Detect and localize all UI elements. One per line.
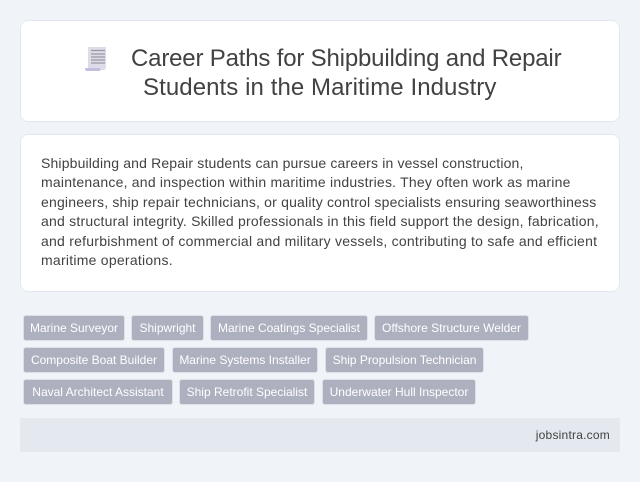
description text: maritime operations. [41,252,173,268]
footer bar [20,418,620,452]
job tags: Marine Systems Installer [179,353,311,367]
job tags: Naval Architect Assistant [32,385,164,399]
description text: and structural integrity. Skilled professionals in this field support the design, fabrication, [41,213,599,229]
job tags: Marine Coatings Specialist [218,321,360,335]
job tags: Ship Propulsion Technician [333,353,476,367]
icon: paper scroll [85,47,106,71]
job tags: Ship Retrofit Specialist [187,385,307,399]
job tags [23,315,529,405]
job tags: Offshore Structure Welder [382,321,521,335]
title [131,45,562,101]
panel: description [20,134,620,292]
description text [41,155,599,268]
job tags: Marine Surveyor [30,321,118,335]
title: Career Paths for Shipbuilding and Repair [131,45,561,72]
job tags: Underwater Hull Inspector [330,385,468,399]
title: Students in the Maritime Industry [143,74,496,101]
job tags: Shipwright [139,321,196,335]
description text: and refurbishment of commercial and military vessels, contributing to safe and efficient [41,233,597,249]
description text: engineers, ship repair technicians, or quality control specialists ensuring seaworthiness [41,194,596,210]
description text: Shipbuilding and Repair students can pursue careers in vessel construction, [41,155,524,171]
panel: header [20,20,620,122]
footer source text: jobsintra.com [536,428,610,442]
description text: maintenance, and inspection within maritime industries. They often work as marine [41,174,571,190]
job tags: Composite Boat Builder [31,353,157,367]
